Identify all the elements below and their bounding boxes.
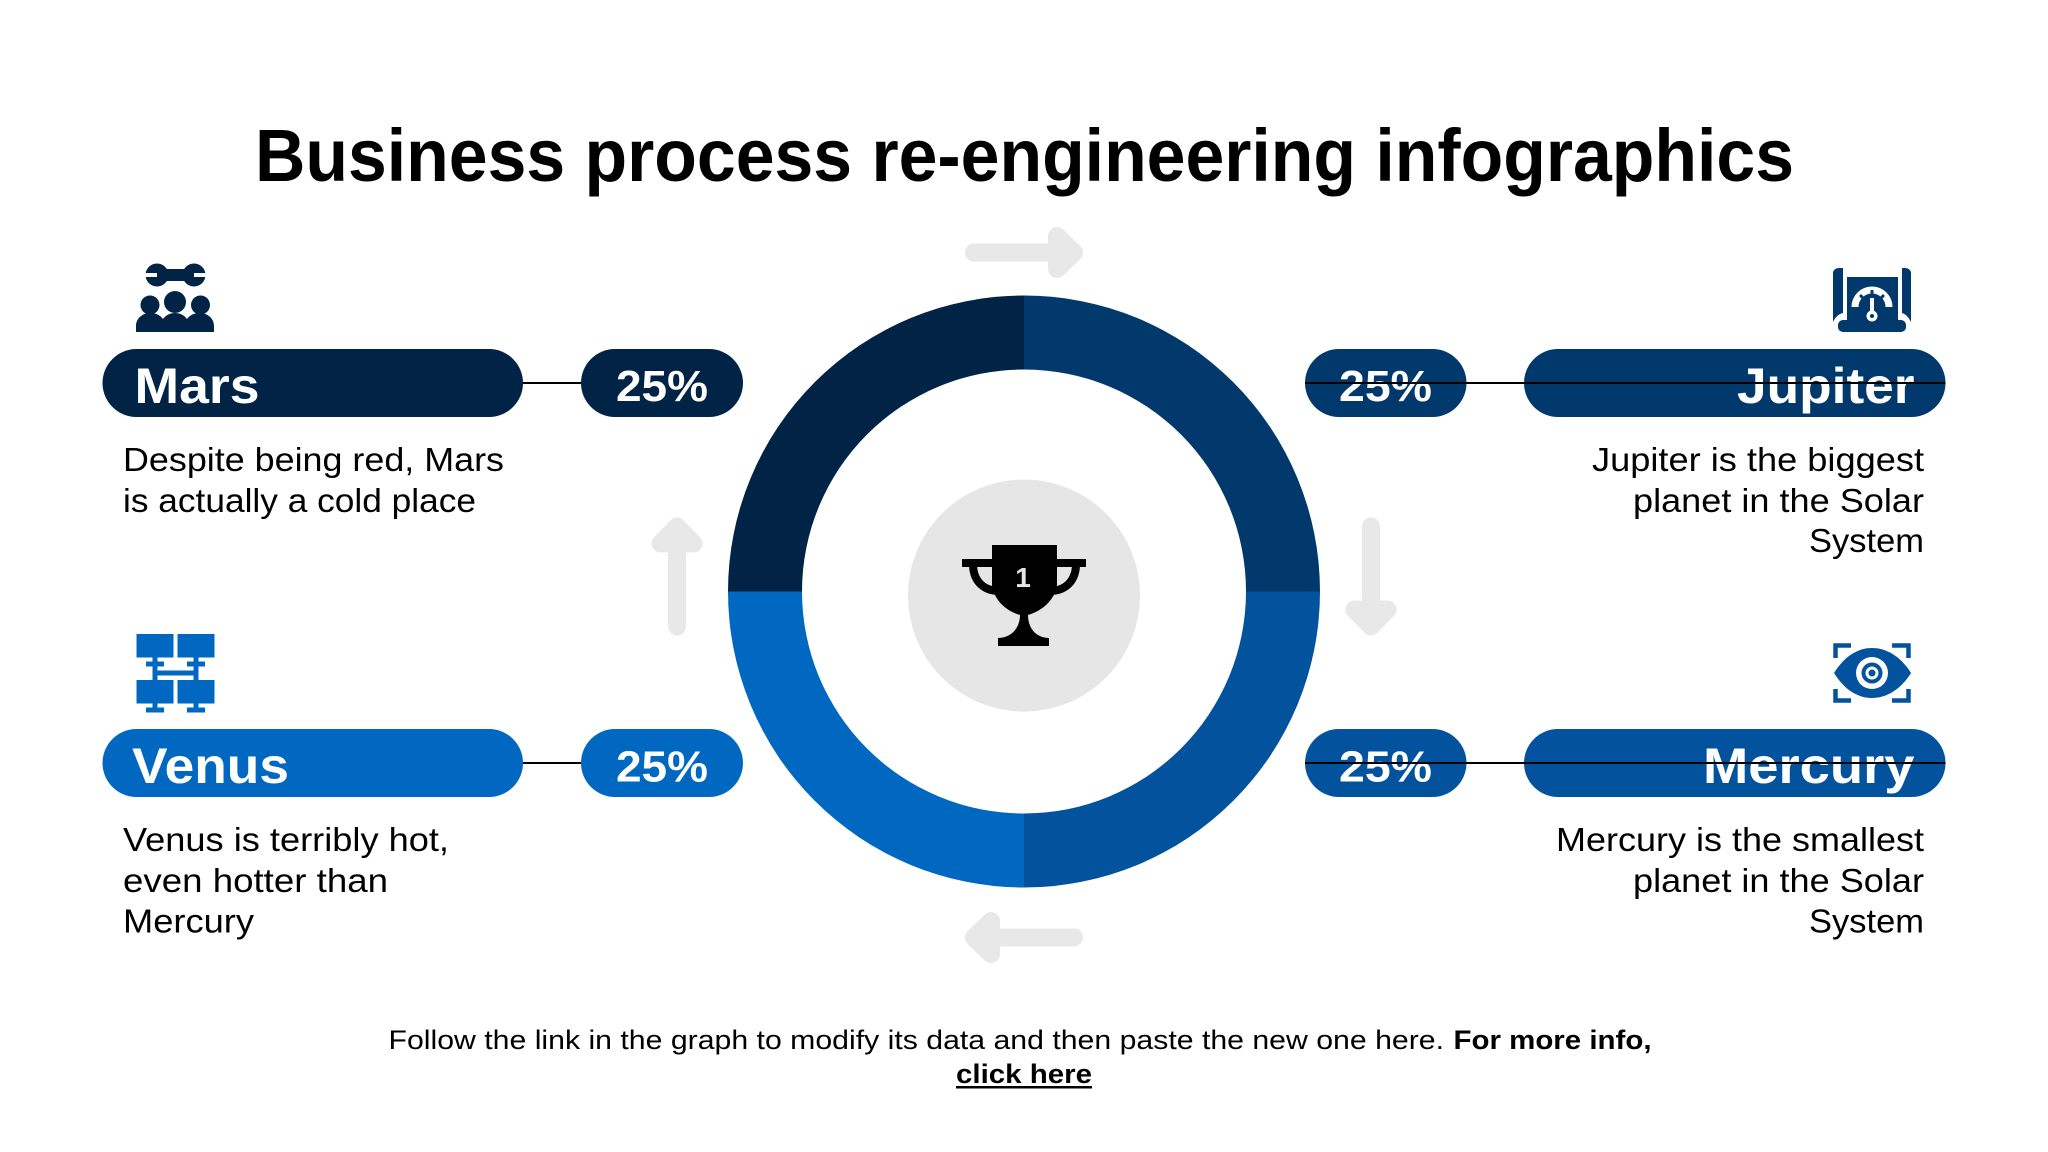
panel: Mars — [102, 264, 743, 519]
percentage pill — [1305, 349, 1466, 417]
connector line — [1305, 762, 1946, 764]
percentage pill — [581, 349, 743, 417]
name pill — [102, 349, 523, 417]
description: is actually a cold place — [123, 482, 476, 519]
icon: wrench and team — [136, 264, 214, 332]
footer note: click here — [956, 1059, 1092, 1089]
panel: Mercury — [1305, 646, 1946, 940]
ring segment: Venus 25% — [728, 592, 1024, 888]
percentage value: 25% — [616, 742, 708, 792]
connector line — [523, 382, 581, 384]
name label: Mars — [134, 358, 260, 414]
description — [123, 821, 449, 940]
panel: Venus — [102, 634, 743, 940]
ring segment: Mars 25% — [728, 296, 1024, 592]
arrow: bottom, pointing left — [974, 921, 1083, 954]
description — [123, 441, 504, 519]
name pill — [1524, 729, 1946, 797]
description: planet in the Solar — [1633, 482, 1924, 519]
arrow: top, pointing right — [965, 236, 1074, 269]
icon: trophy: 1 — [1015, 562, 1031, 593]
footer note: For more info, — [1454, 1025, 1652, 1055]
icon: network of monitors — [136, 634, 214, 712]
ring segment: Jupiter 25% — [1024, 296, 1320, 592]
donut chart — [728, 296, 1320, 888]
name pill — [102, 729, 523, 797]
center circle with trophy — [908, 480, 1140, 712]
description — [1592, 441, 1924, 559]
description: even hotter than — [123, 862, 388, 899]
arrow: right, pointing down — [1354, 518, 1388, 626]
percentage pill — [581, 729, 743, 797]
icon: eye with focus brackets — [1834, 646, 1911, 700]
description: System — [1809, 522, 1924, 559]
description: Despite being red, Mars — [123, 441, 504, 478]
icon: gauge blueprint — [1833, 268, 1911, 332]
description: System — [1809, 902, 1924, 940]
description: Mercury is the smallest — [1556, 821, 1924, 858]
arrow: left, pointing up — [660, 526, 694, 636]
name label: Jupiter — [1737, 358, 1914, 414]
description — [1556, 821, 1924, 940]
percentage value: 25% — [616, 362, 708, 411]
percentage value: 25% — [1339, 742, 1432, 792]
connector line — [523, 762, 581, 764]
title: Business process re-engineering infographics — [255, 114, 1794, 197]
description: Mercury — [123, 902, 255, 940]
name label: Mercury — [1703, 738, 1915, 794]
center circle — [908, 480, 1140, 712]
percentage pill — [1305, 729, 1466, 797]
footer note — [388, 1025, 1652, 1089]
ring segment: Mercury 25% — [1024, 592, 1320, 888]
name label: Venus — [132, 738, 289, 794]
description: Venus is terribly hot, — [123, 821, 449, 858]
description: planet in the Solar — [1633, 862, 1924, 899]
footer note: Follow the link in the graph to modify its data and then paste the new one here. — [388, 1025, 1444, 1055]
percentage value: 25% — [1339, 362, 1432, 411]
panel: Jupiter — [1305, 268, 1946, 559]
connector line — [1305, 382, 1946, 384]
name pill — [1524, 349, 1946, 417]
icon: trophy — [962, 545, 1086, 646]
description: Jupiter is the biggest — [1592, 441, 1924, 478]
